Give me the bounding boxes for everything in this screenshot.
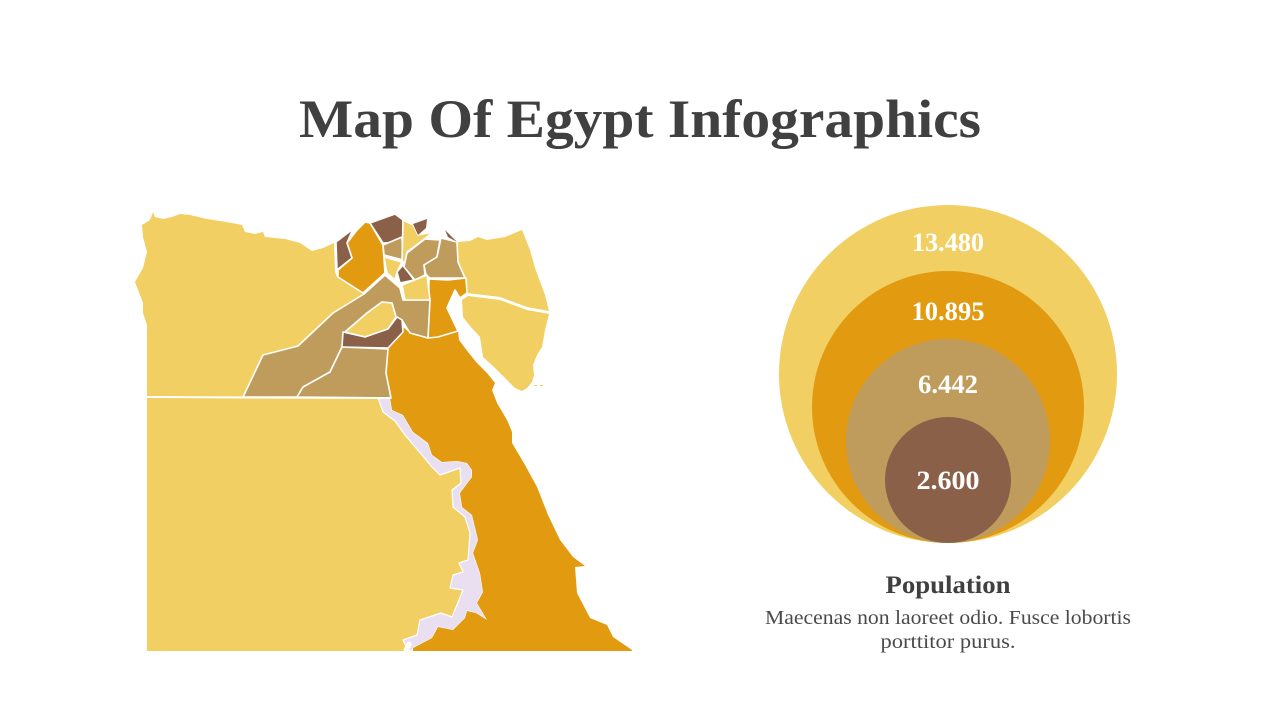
- map of Egypt: [135, 212, 632, 651]
- region: Damietta: [413, 219, 427, 235]
- heading: population: Population: [886, 572, 1011, 599]
- circle: 10.895: 10.895: [912, 297, 984, 326]
- region: Sharqia west: [404, 239, 440, 280]
- title: Map Of Egypt Infographics: [299, 89, 981, 149]
- region: Dakahlia: [402, 220, 433, 262]
- region: Alexandria: [336, 229, 353, 270]
- region: Suez: [428, 278, 467, 338]
- river Nile: [378, 398, 487, 651]
- circle: 6.442: [846, 339, 1050, 543]
- region: Qalyubia: [397, 265, 414, 283]
- region: Sharqia east: [424, 238, 465, 278]
- region: Assiut: [297, 347, 391, 398]
- circle: 13.480: [779, 205, 1117, 543]
- region: north-west desert: [135, 212, 364, 397]
- circle: 2.600: 2.600: [916, 466, 980, 495]
- text block: description: [765, 607, 1131, 653]
- text block: description: Maecenas non laoreet odio. Fusce lobortis: [765, 607, 1131, 629]
- region: North Sinai: [458, 230, 549, 311]
- region: Beheira: [338, 222, 385, 293]
- text block: description: porttitor purus.: [880, 631, 1016, 653]
- circle: 6.442: 6.442: [918, 370, 978, 399]
- region: Cairo: [402, 275, 430, 300]
- region: south-west desert: [147, 398, 470, 651]
- region: Beni Suef: [342, 317, 403, 348]
- region: Kafr El Sheikh: [370, 214, 403, 243]
- circle: 13.480: 13.480: [912, 228, 984, 257]
- region: Minya band: [243, 275, 430, 397]
- circle: 10.895: [812, 271, 1084, 543]
- region: Port Said: [445, 230, 457, 242]
- region: Gharbia: [383, 237, 403, 260]
- island: Red Sea specks: [534, 385, 543, 386]
- border: desert line: [147, 397, 391, 398]
- region: Red Sea governorate: [386, 327, 632, 651]
- nested circle chart: population: [779, 205, 1117, 543]
- region: South Sinai: [462, 296, 549, 391]
- circle: 2.600: [885, 417, 1011, 543]
- river Nile: southern gap: [406, 644, 409, 650]
- region: Fayoum: [345, 302, 396, 337]
- region: Menoufia: [384, 257, 402, 280]
